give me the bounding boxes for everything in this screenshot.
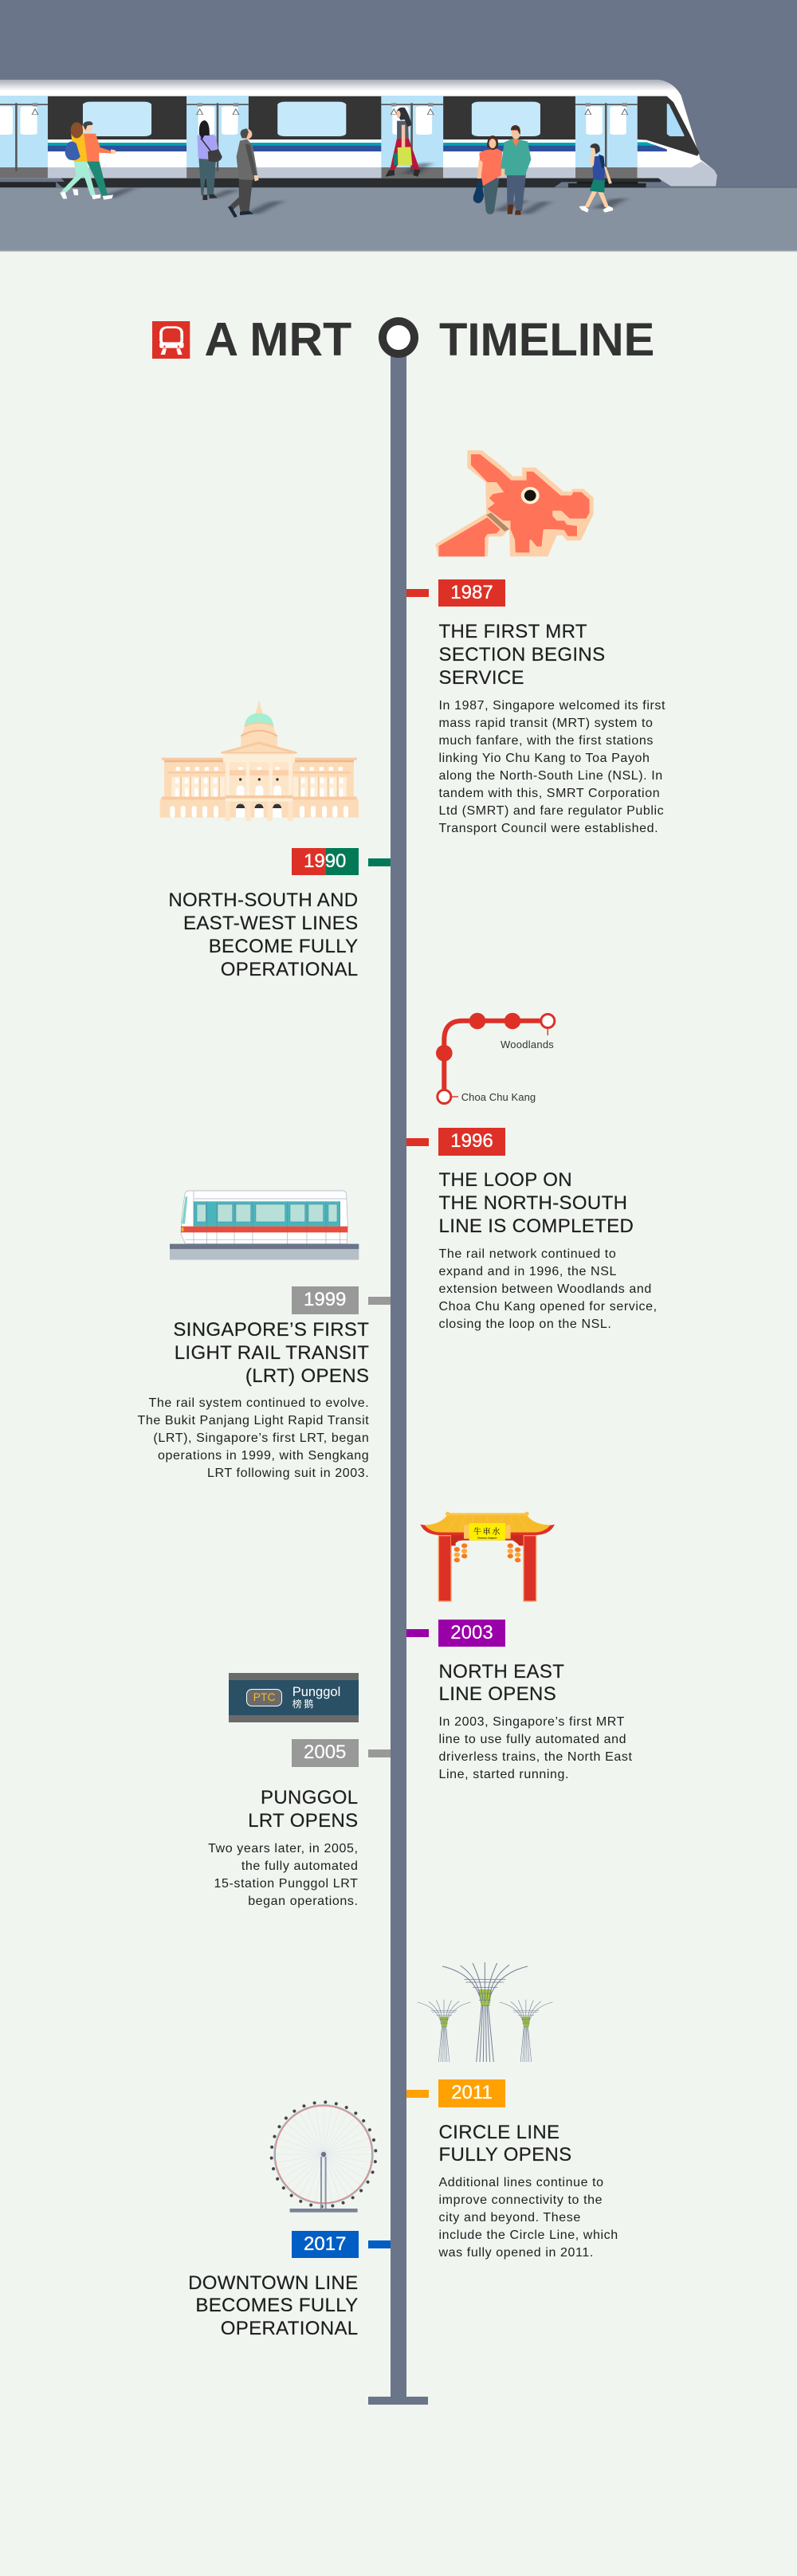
text: 1987 description: In 1987, Singapore welcomed its first [438, 698, 665, 713]
panel: 2017 Downtown Line [188, 2101, 391, 2339]
icon: Singapore Flyer wheel [269, 2101, 378, 2213]
text: 1999 description: The rail system continued to evolve. [148, 1396, 369, 1410]
icon: Chinatown gate: Chinatown, Singapore [477, 1537, 497, 1539]
heading: North East Line opens: LINE OPENS [438, 1683, 556, 1705]
heading: A MRT: A MRT [204, 312, 351, 365]
year badge: 2005: 2005 [304, 1742, 346, 1763]
panel: 1987 first MRT section [406, 450, 665, 835]
icon: dragon playground [435, 450, 594, 556]
text: 2011 description [438, 2176, 618, 2260]
heading: lines fully operational [168, 889, 359, 980]
icon: station ring [379, 317, 418, 358]
text: 2011 description: city and beyond. These [438, 2211, 581, 2225]
text: 1987 description: mass rapid transit (MRT) system to [438, 716, 654, 730]
year badge: 1990 red and green: 1990 [304, 850, 346, 872]
heading: Downtown Line fully operational: BECOMES FULLY [195, 2295, 359, 2316]
icon: Chinatown gate [420, 1511, 555, 1602]
text: 2003 description: Line, started running. [438, 1768, 569, 1781]
year badge: 2017 [292, 2231, 359, 2258]
heading: first light rail transit: LIGHT RAIL TRANSIT [175, 1342, 369, 1364]
year badge: 1996 [438, 1128, 505, 1156]
year badge: 1990 red and green [292, 848, 359, 875]
text: 1996 description: closing the loop on the NSL. [438, 1317, 611, 1331]
text: 1999 description: (LRT), Singapore’s first LRT, began [153, 1431, 369, 1445]
text: 1996 description: extension between Woodlands and [438, 1282, 652, 1296]
woman with yellow shopping bag [385, 108, 420, 177]
heading: the loop on the NSL: THE LOOP ON [438, 1169, 572, 1191]
text: 1999 description: LRT following suit in 2003. [207, 1467, 369, 1480]
panel: 2005 Punggol LRT [208, 1673, 391, 1908]
text: 2005 description: Two years later, in 2005, [208, 1841, 359, 1855]
text: 1987 description: Transport Council were established. [438, 821, 658, 835]
train [0, 80, 717, 187]
text: 2011 description: Additional lines continue to [438, 2176, 604, 2189]
year badge: 2017: 2017 [304, 2233, 346, 2255]
text: 2005 description: the fully automated [241, 1859, 359, 1873]
heading: the loop on the NSL: THE NORTH-SOUTH [438, 1192, 627, 1214]
text: 2003 description [438, 1715, 633, 1781]
panel: 1996 loop completed [406, 1012, 658, 1331]
text: 1987 description: tandem with this, SMRT Corporation [438, 786, 660, 800]
map: Woodlands to Choa Chu Kang: Woodlands [501, 1039, 554, 1050]
text: 1987 description: linking Yio Chu Kang to Toa Payoh [438, 751, 650, 765]
text: 1987 description [438, 698, 665, 835]
boy walking [579, 143, 613, 213]
tick: 2011 [406, 2090, 429, 2098]
heading: Punggol LRT opens: PUNGGOL [261, 1787, 359, 1808]
sign: PTC pill [246, 1689, 282, 1706]
text: 2011 description: was fully opened in 2011. [438, 2246, 594, 2260]
text: 2011 description: include the Circle Line, which [438, 2228, 618, 2242]
heading: lines fully operational: EAST-WEST LINES [183, 913, 359, 934]
icon: LRT train on viaduct [170, 1191, 359, 1260]
text: 1999 description [137, 1396, 369, 1480]
year badge: 1996: 1996 [450, 1130, 493, 1152]
year badge: 1999: 1999 [304, 1289, 346, 1310]
heading: Circle Line fully opens [438, 2122, 572, 2166]
heading: the first MRT section: SECTION BEGINS [438, 644, 605, 666]
text: 2003 description: line to use fully automated and [438, 1733, 626, 1745]
icon: Chinatown gate: 牛車水 [473, 1526, 501, 1537]
tick: 1999 [368, 1297, 391, 1305]
heading: the first MRT section [438, 621, 605, 689]
text: 1996 description: Choa Chu Kang opened for service, [438, 1300, 658, 1314]
sign: station name: Punggol [292, 1685, 340, 1699]
icon: Supertrees [418, 1962, 553, 2062]
heading: North East Line opens [438, 1661, 564, 1705]
sign: PTC pill: PTC [253, 1690, 276, 1703]
heading: Circle Line fully opens: CIRCLE LINE [438, 2122, 559, 2143]
icon: red train logo [152, 321, 190, 359]
couple standing [473, 125, 531, 215]
panel: 1999 first LRT [137, 1191, 391, 1480]
timeline base bar [368, 2397, 428, 2405]
title [152, 312, 654, 366]
heading: TIMELINE: TIMELINE [439, 314, 654, 366]
sign: station name in Chinese: 榜鹅 [292, 1698, 316, 1710]
heading: lines fully operational: NORTH-SOUTH AND [168, 889, 359, 911]
text: 2003 description: In 2003, Singapore’s first MRT [438, 1715, 625, 1728]
tick: 1987 [406, 589, 429, 597]
icon: colonial building [159, 701, 359, 821]
tick: 2003 [406, 1629, 429, 1637]
heading: lines fully operational: BECOME FULLY [209, 936, 359, 957]
heading: first light rail transit: SINGAPORE’S FIRST [173, 1319, 369, 1341]
heading: North East Line opens: NORTH EAST [438, 1661, 564, 1683]
text: 2003 description: driverless trains, the North East [438, 1750, 633, 1763]
woman with shoulder bag [197, 120, 222, 200]
tick: 2017 [368, 2240, 391, 2248]
heading: first light rail transit [173, 1319, 369, 1387]
text: 1987 description: much fanfare, with the first stations [438, 733, 654, 748]
man in grey suit [228, 128, 259, 218]
heading: the loop on the NSL: LINE IS COMPLETED [438, 1215, 634, 1237]
tick: 1990 [368, 858, 391, 866]
text: 2005 description: began operations. [248, 1894, 359, 1908]
year badge: 2011 [438, 2079, 505, 2107]
text: 1999 description: The Bukit Panjang Light Rapid Transit [137, 1414, 369, 1427]
couple walking left [60, 121, 116, 200]
heading: Punggol LRT opens [248, 1787, 359, 1832]
heading: Circle Line fully opens: FULLY OPENS [438, 2144, 572, 2166]
icon: Punggol station sign [229, 1673, 359, 1722]
year badge: 1987: 1987 [450, 582, 493, 603]
year badge: 2003: 2003 [450, 1622, 493, 1643]
panel: 2011 Circle Line [406, 1962, 618, 2260]
tick: 1996 [406, 1138, 429, 1146]
hero: train and platform illustration [0, 0, 797, 252]
text: 2011 description: improve connectivity to the [438, 2193, 603, 2207]
panel: 1990 lines fully operational [159, 701, 391, 980]
text: 1987 description: along the North-South Line (NSL). In [438, 768, 663, 783]
heading: lines fully operational: OPERATIONAL [221, 959, 359, 980]
heading: the first MRT section: SERVICE [438, 667, 524, 689]
heading: first light rail transit: (LRT) OPENS [245, 1365, 369, 1387]
map: Woodlands to Choa Chu Kang [436, 1012, 556, 1105]
text: 1996 description [438, 1247, 658, 1331]
year badge: 1987 [438, 579, 505, 607]
panel: 2003 North East Line [406, 1511, 633, 1781]
heading: the loop on the NSL [438, 1169, 634, 1237]
text: 1996 description: The rail network continued to [438, 1247, 616, 1261]
heading: the first MRT section: THE FIRST MRT [438, 621, 587, 642]
text: 2005 description: 15-station Punggol LRT [214, 1876, 359, 1891]
text: 2005 description [208, 1841, 359, 1908]
year badge: 2005 [292, 1739, 359, 1767]
heading: Punggol LRT opens: LRT OPENS [248, 1810, 359, 1832]
text: 1999 description: operations in 1999, with Sengkang [158, 1449, 369, 1463]
tick: 2005 [368, 1749, 391, 1757]
text: 1996 description: expand and in 1996, the NSL [438, 1265, 617, 1278]
people on the platform [60, 108, 628, 218]
heading: Downtown Line fully operational: DOWNTOWN LINE [188, 2272, 359, 2294]
year badge: 2003 [438, 1620, 505, 1647]
text: 1987 description: Ltd (SMRT) and fare regulator Public [438, 803, 664, 818]
year badge: 1999 [292, 1286, 359, 1314]
heading: Downtown Line fully operational: OPERATIONAL [221, 2318, 359, 2339]
heading: Downtown Line fully operational [188, 2272, 359, 2339]
map: Woodlands to Choa Chu Kang: Choa Chu Kang [461, 1091, 536, 1103]
year badge: 2011: 2011 [451, 2082, 493, 2103]
timeline trunk [391, 351, 406, 2399]
